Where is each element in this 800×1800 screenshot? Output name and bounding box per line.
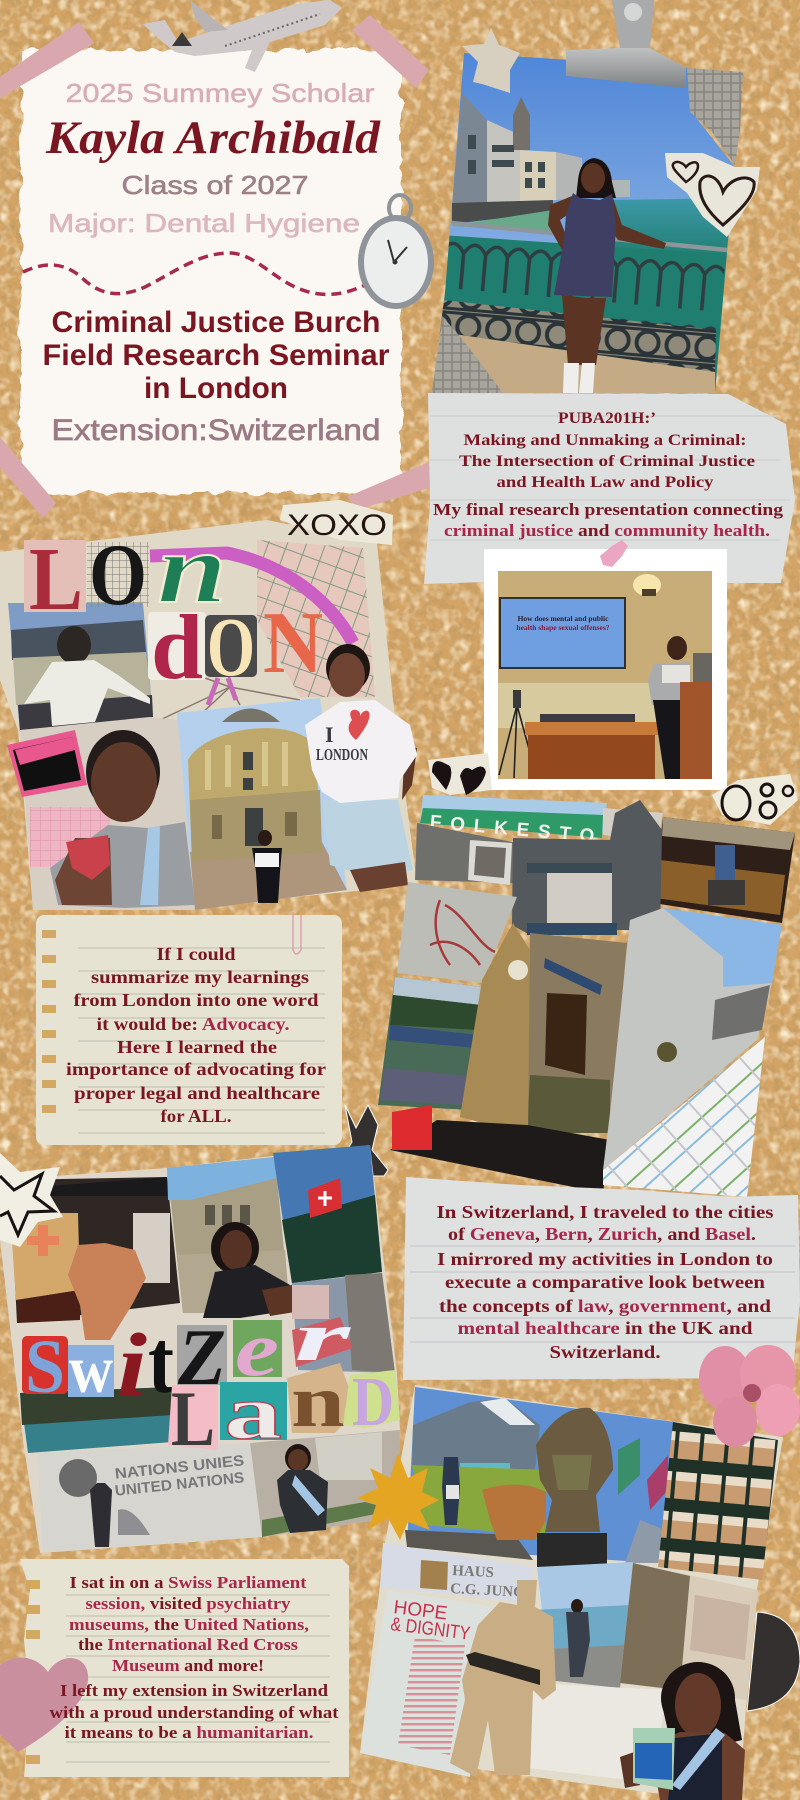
- text: Advocacy reflection: summarize my learnings: [91, 967, 309, 987]
- panel: London landmarks collage: [378, 795, 795, 1197]
- title letters: Switzerland: D: [352, 1364, 394, 1441]
- Swiss flag: [273, 1145, 382, 1283]
- text: extension: Extension:Switzerland: [52, 414, 380, 447]
- icon: xoxo sticker: [280, 500, 393, 545]
- UN wall: [37, 1443, 262, 1552]
- tube map: [603, 1037, 765, 1197]
- icon: pink push pin: [600, 540, 628, 567]
- text: presentation note: My final research presentation connecting: [433, 500, 784, 519]
- panel: Switzerland travel note: [403, 1177, 800, 1380]
- panel: Advocacy note: [36, 912, 342, 1145]
- text: scholar year: 2025 Summey Scholar: [66, 78, 375, 108]
- text: course title: Making and Unmaking a Criminal:: [464, 432, 746, 449]
- text: Advocacy reflection: Here I learned the: [117, 1037, 277, 1057]
- projector screen: How does mental and public: [518, 614, 609, 623]
- Radcliffe Camera: [177, 698, 347, 910]
- river: [614, 198, 728, 260]
- icon: airplane: [143, 0, 342, 72]
- title letters: Switzerland: w: [69, 1331, 113, 1407]
- panel: Swiss museums collage: [360, 1385, 783, 1800]
- icon: pocket watch: [358, 195, 434, 309]
- icon: black hearts sticker: [428, 753, 492, 795]
- text: activities and reflection: session, visited psychiatry: [86, 1594, 291, 1613]
- C.G. Jung bust: [536, 1408, 613, 1567]
- I love London person: I: [325, 722, 334, 747]
- text: activities and reflection: with a proud understanding of what: [50, 1703, 339, 1722]
- text: Advocacy reflection: from London into one word: [74, 990, 319, 1010]
- street: [390, 1120, 610, 1193]
- tan uniform on mannequin: [450, 1580, 556, 1777]
- woman on lake shore: [528, 1562, 633, 1688]
- heading: seminar title: Criminal Justice Burch: [52, 306, 380, 339]
- title letters: Switzerland: i: [117, 1316, 147, 1415]
- Parliament: [167, 1157, 295, 1318]
- cathedral interior: [653, 817, 795, 923]
- flags: [618, 1438, 668, 1563]
- text: cities and comparison: mental healthcare in the UK and: [458, 1318, 752, 1338]
- Hope and Dignity poster: HOPE: [392, 1597, 448, 1625]
- panel: Parliament note: [0, 1559, 349, 1777]
- text: cities and comparison: I mirrored my activities in London to: [437, 1249, 773, 1269]
- title letters: London: N: [263, 595, 323, 692]
- tape strips: [0, 15, 429, 518]
- icon: camera sticker: [7, 730, 87, 797]
- Haus C.G. Jung sign: C.G. JUNG: [450, 1581, 525, 1601]
- eye ring: [150, 553, 353, 643]
- torn paper: [21, 50, 401, 493]
- text: presentation note: [433, 500, 784, 540]
- icon: pink flower: [699, 1345, 800, 1447]
- title letters: London: n: [157, 513, 227, 624]
- panel: course note: [424, 393, 795, 592]
- text: cities and comparison: of Geneva , Bern , Zurich , and Basel .: [448, 1224, 756, 1244]
- icon: hearts sticker: [665, 153, 760, 237]
- text: activities and reflection: [50, 1573, 339, 1742]
- UN wall: NATIONS UNIES: [114, 1452, 245, 1483]
- red bus: [392, 1105, 432, 1150]
- panel: Switzerland collage: [0, 1145, 400, 1553]
- photo: Zurich portrait: [430, 53, 743, 395]
- title letters: Switzerland: t: [148, 1313, 174, 1412]
- projector screen: health shape sexual offenses?: [516, 623, 610, 632]
- quay wall and green water: [452, 200, 553, 224]
- icon: xoxo sticker: XOXO: [287, 509, 387, 542]
- icon: bubbles sticker: [712, 774, 798, 825]
- Thames photo: [8, 603, 153, 732]
- title letters: Switzerland: n: [291, 1361, 345, 1443]
- text: course title: and Health Law and Policy: [496, 474, 714, 491]
- title letters: London: L: [29, 530, 83, 629]
- title letters: Switzerland: S: [25, 1325, 65, 1409]
- dashed route line: [23, 253, 372, 294]
- Hope and Dignity poster: [360, 1590, 493, 1777]
- Big Ben: [460, 923, 530, 1135]
- title letters: Switzerland: a: [224, 1371, 282, 1455]
- icon: torn paper heart: [0, 1657, 88, 1752]
- plaid tape: [687, 68, 743, 165]
- documents: [520, 1683, 667, 1783]
- map: [257, 540, 375, 697]
- text: activities and reflection: museums, the United Nations,: [69, 1615, 309, 1634]
- pavement: [430, 332, 715, 395]
- text: student name: Kayla Archibald: [45, 112, 382, 164]
- title letters: Switzerland: e: [235, 1305, 279, 1392]
- exhibit: [10, 1177, 180, 1340]
- text: presentation note: criminal justice and community health.: [444, 521, 770, 540]
- woman: [548, 158, 666, 393]
- student selfie: [620, 1662, 745, 1800]
- railing: [448, 242, 724, 330]
- text: cities and comparison: Switzerland.: [550, 1342, 660, 1362]
- gallery wall: [415, 823, 517, 883]
- lower ornate rail: [440, 300, 716, 372]
- text: activities and reflection: I sat in on a Swiss Parliament: [70, 1573, 307, 1592]
- Haus C.G. Jung sign: [380, 1543, 533, 1603]
- lake: [20, 1387, 173, 1453]
- speaker: [648, 636, 712, 779]
- I love London person: LONDON: [316, 745, 368, 764]
- text: cities and comparison: execute a comparative look between: [445, 1272, 765, 1292]
- text: Advocacy reflection: If I could: [156, 944, 236, 964]
- gothic doorway: [527, 933, 627, 1133]
- icon: dark circle sticker: [747, 1612, 800, 1711]
- Royal Courts of Justice: [603, 908, 782, 1170]
- panel: London collage: [0, 513, 417, 910]
- Folkestone sign: FOLKESTO: [429, 812, 595, 847]
- buildings: [452, 93, 487, 205]
- pond and punts: [378, 977, 482, 1110]
- mountains and meadow: [405, 1387, 675, 1563]
- text: class year: Class of 2027: [122, 170, 308, 200]
- text: major: Major: Dental Hygiene: [48, 208, 360, 238]
- text: activities and reflection: the International Red Cross: [78, 1635, 298, 1654]
- Folkestone sign: [420, 795, 607, 847]
- photo: research presentation polaroid: [484, 549, 727, 790]
- text: Advocacy reflection: for ALL.: [160, 1106, 232, 1126]
- herbal shelves: [658, 1422, 778, 1580]
- text: Advocacy reflection: importance of advocating for: [66, 1059, 326, 1079]
- heading: seminar title: [42, 306, 390, 405]
- text: Advocacy reflection: [66, 944, 326, 1126]
- title letters: London: [24, 513, 323, 698]
- Tower Bridge: [512, 800, 663, 935]
- pharmacopoeia book: [620, 1563, 758, 1700]
- selfie background: [20, 717, 195, 910]
- icon: glitter star: [462, 28, 520, 93]
- title letters: Switzerland: r: [294, 1299, 352, 1376]
- icon: rabbit silhouette: [344, 1105, 388, 1176]
- text: course title: PUBA201H:’: [558, 410, 656, 427]
- street: [292, 1273, 395, 1373]
- text: course title: The Intersection of Criminal Justice: [459, 453, 755, 470]
- Haus C.G. Jung sign: HAUS: [452, 1563, 494, 1581]
- text: Advocacy reflection: proper legal and healthcare: [74, 1083, 320, 1103]
- title letters: London: O: [89, 527, 147, 624]
- I love London person: [305, 644, 417, 892]
- title letters: London: O: [207, 601, 255, 694]
- text: cities and comparison: the concepts of law, government , and: [439, 1296, 771, 1316]
- Hope and Dignity poster: & DIGNITY: [389, 1614, 472, 1645]
- selfie: [50, 730, 195, 908]
- panel: title card: [0, 15, 429, 518]
- title letters: Switzerland: L: [171, 1375, 215, 1462]
- UN wall: UNITED NATIONS: [114, 1469, 245, 1500]
- icon: sun sticker: [357, 1453, 439, 1540]
- text: activities and reflection: I left my extension in Switzerland: [60, 1681, 329, 1700]
- text: course title: [459, 410, 755, 491]
- icon: star sticker: [0, 1153, 63, 1247]
- text: activities and reflection: Museum and more!: [112, 1656, 264, 1675]
- heading: seminar title: Field Research Seminar: [42, 339, 390, 372]
- icon: binder clip: [566, 0, 686, 88]
- heading: seminar title: in London: [144, 372, 288, 405]
- title letters: London: d: [151, 596, 203, 698]
- text: Advocacy reflection: it would be: Advocacy.: [96, 1014, 290, 1034]
- text: cities and comparison: [436, 1202, 774, 1362]
- title letters: Switzerland: Z: [177, 1314, 226, 1402]
- text: activities and reflection: it means to be a humanitarian.: [64, 1723, 314, 1742]
- Reformation wall portrait: [250, 1430, 400, 1537]
- text: cities and comparison: In Switzerland, I traveled to the cities: [436, 1202, 774, 1222]
- title letters: Switzerland: [22, 1299, 400, 1462]
- projector screen: [499, 597, 626, 669]
- sketch on paper: [397, 882, 517, 983]
